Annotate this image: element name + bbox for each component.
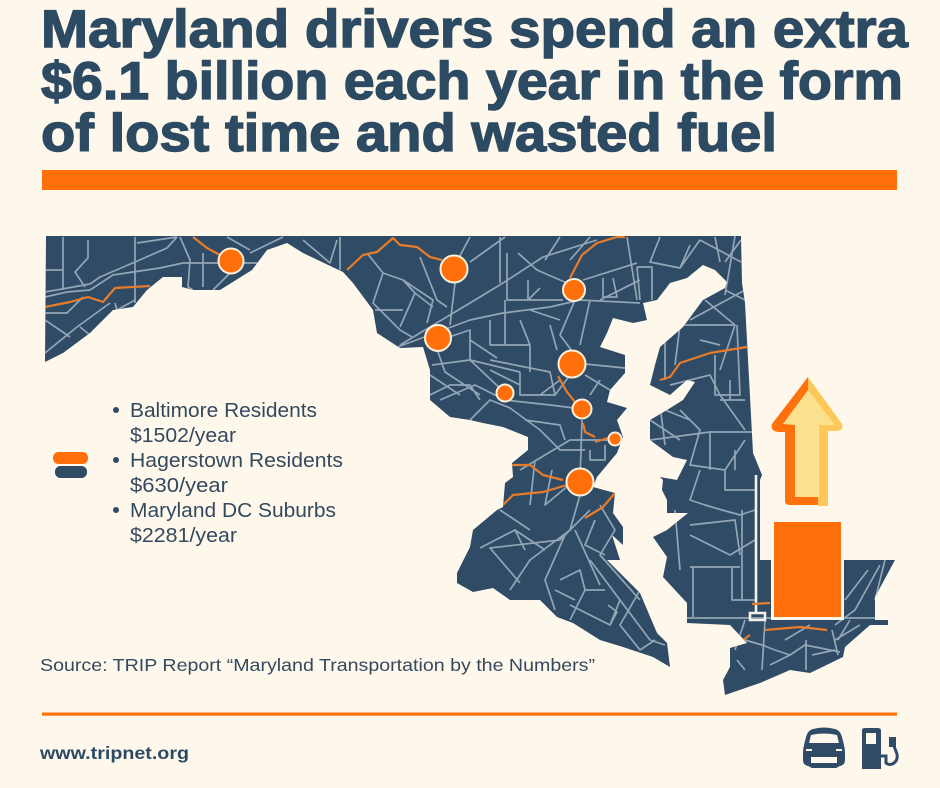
footer divider bbox=[42, 712, 897, 716]
title bbox=[41, 0, 909, 163]
map landmass bbox=[45, 236, 895, 695]
website link text: www.tripnet.org bbox=[39, 743, 189, 763]
list of resident costs: $1502/year bbox=[130, 425, 236, 447]
list of resident costs: Baltimore Residents bbox=[130, 400, 317, 422]
highlighted orange roads bbox=[45, 237, 827, 640]
list of resident costs bbox=[113, 400, 343, 547]
city markers bbox=[218, 248, 622, 496]
road network bbox=[45, 236, 890, 670]
source note: Source: TRIP Report “Maryland Transportation by the Numbers” bbox=[40, 655, 595, 675]
map of Maryland bbox=[45, 236, 895, 695]
orange bar chart column bbox=[771, 522, 844, 620]
legend swatches bbox=[53, 452, 88, 478]
title: $6.1 billion each year in the form bbox=[41, 52, 903, 111]
list of resident costs: Hagerstown Residents bbox=[130, 450, 343, 472]
white spine line bbox=[750, 475, 765, 620]
icon: up arrow bbox=[772, 377, 842, 506]
icon: fuel pump bbox=[862, 728, 897, 769]
title underline bar bbox=[42, 170, 897, 190]
list of resident costs: $630/year bbox=[130, 475, 228, 497]
title: Maryland drivers spend an extra bbox=[41, 0, 909, 59]
title: of lost time and wasted fuel bbox=[41, 104, 777, 163]
list of resident costs: Maryland DC Suburbs bbox=[130, 500, 336, 522]
list of resident costs: $2281/year bbox=[130, 525, 237, 547]
icon: car bbox=[803, 728, 845, 768]
